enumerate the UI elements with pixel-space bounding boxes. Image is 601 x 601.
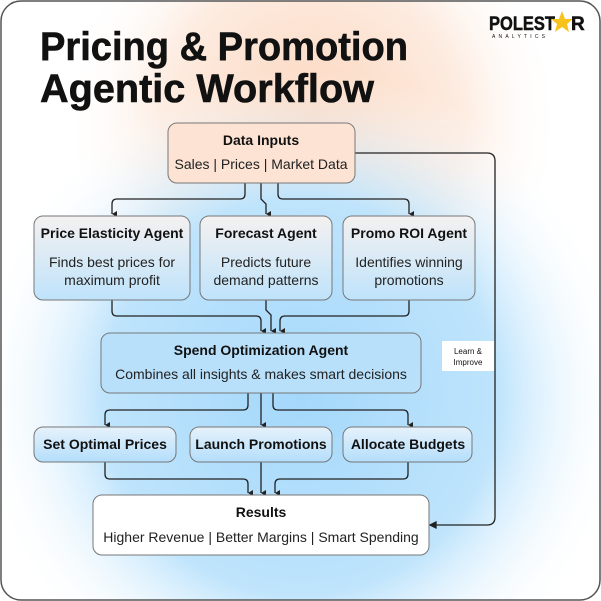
action: launch promotions bbox=[190, 427, 332, 462]
agent: price elasticity: Finds best prices for bbox=[49, 254, 175, 270]
agent: price elasticity bbox=[34, 216, 190, 300]
logo: Polestar Analytics: POLEST bbox=[489, 14, 555, 35]
data inputs box bbox=[168, 123, 355, 183]
action: launch promotions: Launch Promotions bbox=[195, 436, 327, 452]
action: allocate budgets: Allocate Budgets bbox=[351, 436, 465, 452]
agent: promo roi bbox=[343, 216, 475, 300]
agent: forecast: Predicts future bbox=[221, 254, 311, 270]
data inputs box: Sales | Prices | Market Data bbox=[174, 156, 348, 172]
agent: promo roi: Promo ROI Agent bbox=[351, 225, 467, 241]
logo: Polestar Analytics: R bbox=[571, 14, 585, 35]
title: Pricing & Promotion bbox=[40, 25, 408, 69]
action: set optimal prices: Set Optimal Prices bbox=[43, 436, 167, 452]
learn & improve label bbox=[442, 341, 494, 371]
data inputs box: Data Inputs bbox=[223, 132, 299, 148]
learn & improve label: Learn & bbox=[454, 347, 483, 356]
spend optimization agent bbox=[101, 333, 421, 393]
title bbox=[40, 25, 408, 111]
learn & improve label: Improve bbox=[454, 358, 483, 367]
agent: price elasticity: Price Elasticity Agent bbox=[41, 225, 184, 241]
agent: price elasticity: maximum profit bbox=[64, 272, 160, 288]
agent: forecast bbox=[200, 216, 332, 300]
agent: forecast: demand patterns bbox=[213, 272, 319, 288]
action: allocate budgets bbox=[343, 427, 472, 462]
agent: forecast: Forecast Agent bbox=[215, 225, 317, 241]
spend optimization agent: Combines all insights & makes smart decisions bbox=[115, 366, 407, 382]
logo: Polestar Analytics: ANALYTICS bbox=[492, 34, 548, 40]
connectors bbox=[105, 153, 495, 528]
results box: Results bbox=[236, 504, 286, 520]
title: Agentic Workflow bbox=[40, 67, 375, 111]
spend optimization agent: Spend Optimization Agent bbox=[174, 342, 349, 358]
agent: promo roi: promotions bbox=[374, 272, 444, 288]
results box: Higher Revenue | Better Margins | Smart Spending bbox=[103, 529, 419, 545]
logo: Polestar Analytics bbox=[489, 11, 585, 40]
action: set optimal prices bbox=[34, 427, 176, 462]
results box bbox=[93, 495, 429, 555]
agent: promo roi: Identifies winning bbox=[355, 254, 463, 270]
